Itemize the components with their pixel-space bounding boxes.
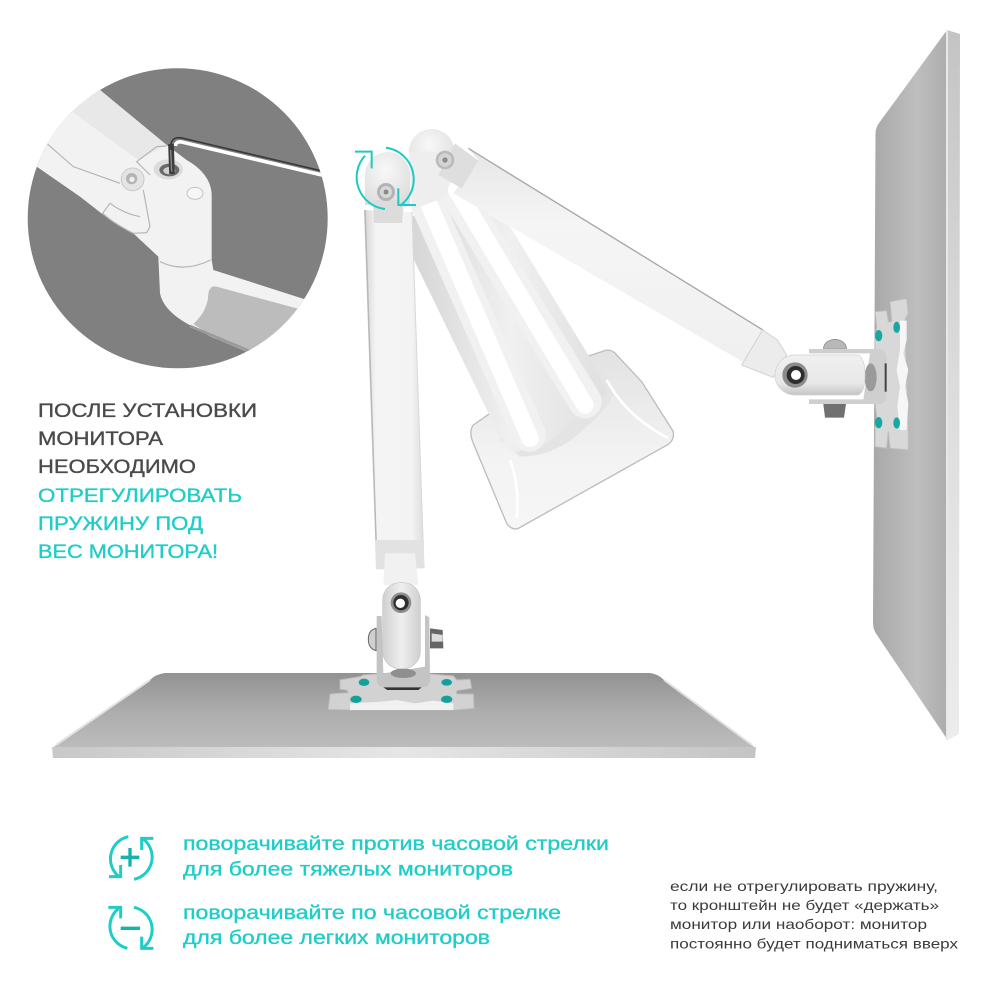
upper ball joint — [409, 129, 454, 174]
heading teal lines: ВЕС МОНИТОРА! — [38, 541, 218, 563]
knuckle — [383, 583, 420, 669]
left spring tube — [428, 207, 530, 438]
heading teal lines — [38, 485, 242, 563]
inset photo: hex key adjusting spring — [28, 68, 328, 368]
left screw — [368, 628, 376, 651]
desk mount bracket — [328, 540, 474, 710]
side note: если не отрегулировать пружину, — [670, 878, 938, 894]
monitor edge — [947, 30, 960, 740]
back column — [413, 193, 607, 453]
inset: arm and column body — [37, 90, 304, 350]
inset: grey wedge under base — [206, 336, 246, 366]
spring arm with base pad — [409, 129, 763, 529]
bracket arms — [377, 615, 430, 687]
right bolt — [430, 628, 443, 648]
upper arm — [453, 148, 763, 362]
inset: base recess — [194, 286, 298, 352]
upper arm hinge tab — [438, 143, 478, 188]
arm end clamp — [375, 540, 424, 569]
desk plate front edge — [52, 747, 756, 758]
hinge body — [775, 355, 865, 395]
upper joint screw — [436, 151, 454, 169]
pad inner block — [500, 370, 613, 457]
text: heavier monitors: для более тяжелых мониторов — [183, 858, 513, 880]
neck — [383, 553, 418, 585]
side note: постоянно будет подниматься вверх — [670, 936, 958, 952]
vesa plate — [875, 298, 908, 450]
desk plate — [52, 673, 756, 758]
icon: clockwise minus — [108, 907, 153, 948]
inset: pivot screw — [121, 168, 144, 191]
monitor mount bracket — [742, 298, 908, 450]
text: lighter monitors — [183, 902, 561, 949]
text: lighter monitors: для более легких мониторов — [183, 927, 490, 949]
joint tab — [742, 330, 787, 377]
side note: то кронштейн не будет «держать» — [670, 897, 939, 913]
hinge screw — [782, 362, 808, 388]
knuckle screw — [391, 592, 411, 613]
lower ball joint — [365, 152, 410, 205]
teal pads — [875, 322, 900, 429]
top screw head — [823, 339, 847, 348]
right spring tube — [455, 190, 585, 405]
white raised strip — [897, 321, 908, 430]
side note — [670, 878, 958, 952]
bottom bolt — [823, 404, 846, 418]
text: heavier monitors — [183, 833, 609, 880]
heading: adjust the spring — [38, 400, 257, 563]
lower arm — [364, 152, 424, 568]
inset: hex key — [171, 138, 325, 176]
pad — [471, 350, 673, 529]
heading dark lines: МОНИТОРА — [38, 428, 163, 450]
heading dark lines: ПОСЛЕ УСТАНОВКИ — [38, 400, 257, 422]
monitor back face — [873, 30, 947, 739]
inset: seam lines — [47, 143, 211, 267]
heading dark lines — [38, 400, 257, 478]
white raised strip — [350, 700, 453, 710]
inset: button on column top — [187, 187, 203, 199]
text: lighter monitors: поворачивайте по часовой стрелке — [183, 902, 561, 924]
top bracket flange — [809, 349, 887, 404]
inset: adjustment socket — [154, 159, 183, 179]
side note: монитор или наоборот: монитор — [670, 916, 927, 932]
base of bracket — [383, 687, 422, 690]
lower joint screw — [377, 183, 395, 201]
lower screw — [391, 669, 416, 678]
heading dark lines: НЕОБХОДИМО — [38, 456, 196, 478]
heading teal lines: ПРУЖИНУ ПОД — [38, 513, 203, 535]
monitor side view — [873, 30, 960, 740]
vesa plate — [328, 674, 474, 710]
lower hinge tab — [373, 200, 404, 223]
rotation arrows on joint — [355, 148, 416, 209]
desk plate top surface — [53, 673, 755, 748]
side screw — [865, 363, 877, 391]
teal pads — [350, 679, 452, 703]
text: heavier monitors: поворачивайте против часовой стрелки — [183, 833, 609, 855]
heading teal lines: ОТРЕГУЛИРОВАТЬ — [38, 485, 242, 507]
icon: counterclockwise plus — [109, 837, 153, 879]
bracket dark gap — [885, 363, 887, 392]
pad highlights — [510, 380, 668, 518]
inset: base lower edge — [190, 326, 253, 353]
inset: arm shading — [72, 90, 167, 160]
